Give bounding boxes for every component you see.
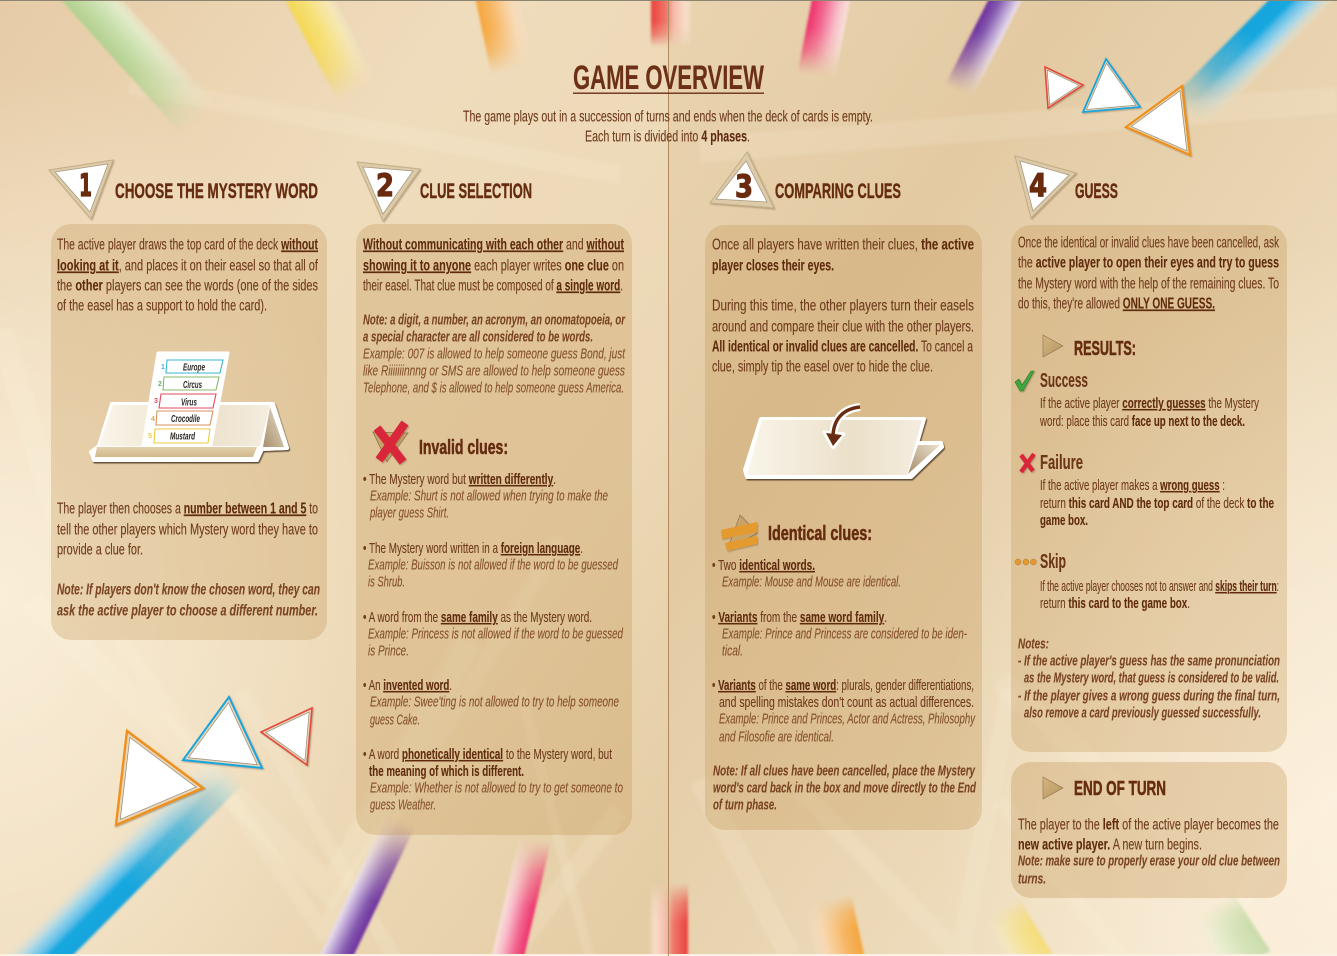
list: invalid clues: Example: Swee'ting is not allowed to try to help someone [370, 694, 619, 710]
result: failure [1021, 452, 1274, 529]
list: invalid clues: Example: Buisson is not allowed if the word to be guessed [368, 558, 619, 574]
icon: triangle 3: 3 [735, 169, 753, 205]
icon: triangle 1 [49, 160, 113, 219]
note and examples: Example: 007 is allowed to help someone guess Bond, just [363, 346, 626, 362]
text block: writing a clue: Without communicating with each other and without [363, 236, 624, 254]
illustration: easel with card: 1 [161, 364, 165, 371]
result: failure: return this card AND the top card of the deck to the [1040, 496, 1274, 512]
result: skip: return this card to the game box. [1040, 596, 1190, 612]
list: identical clues: • Variants from the same word family. [712, 610, 887, 626]
result: failure: If the active player makes a wrong guess : [1040, 478, 1225, 494]
text block: next player [1018, 816, 1280, 888]
illustration: easel with card: Mustard [170, 430, 195, 442]
step 2 heading: CLUE SELECTION [420, 180, 532, 203]
step 2 heading [357, 162, 532, 221]
illustration: easel with card: Circus [183, 379, 202, 391]
icon: end of turn arrow [1043, 777, 1063, 799]
list: invalid clues: guess Weather. [370, 798, 436, 814]
note and examples: Note: a digit, a number, an acronym, an onomatopoeia, or [363, 312, 626, 328]
note: of turn phase. [713, 798, 777, 814]
icon: triangle 4: 4 [1029, 168, 1047, 204]
note: word's card back in the box and move directly to the End [713, 780, 977, 796]
list: invalid clues: • A word phonetically identical to the Mystery word, but [363, 747, 612, 763]
list: invalid clues: • An invented word. [363, 678, 452, 694]
icon: triangle 2 [357, 162, 420, 221]
panel: end of turn [1011, 762, 1287, 898]
list: identical clues [712, 558, 975, 746]
result: success: If the active player correctly guesses the Mystery [1040, 396, 1260, 412]
result: success: word: place this card face up next to the deck. [1039, 414, 1245, 430]
list: identical clues: tical. [722, 644, 743, 660]
list: identical clues: and Filosofie are identical. [719, 730, 834, 746]
panel: comparing clues [705, 225, 982, 830]
text block: drawing the card: of the easel has a support to hold the card). [57, 298, 267, 314]
note: Note: If all clues have been cancelled, place the Mystery [713, 764, 976, 780]
title: GAME OVERVIEW [573, 59, 765, 97]
illustration: tipped easel with arrow [745, 407, 942, 477]
note: Note: If players don't know the chosen word, they can [57, 582, 320, 598]
list: invalid clues: • The Mystery word written in a foreign language. [363, 541, 583, 557]
list: invalid clues [363, 472, 624, 814]
text block: choosing a number: The player then chooses a number between 1 and 5 to [57, 500, 318, 518]
text block: drawing the card: The active player draws the top card of the deck without [57, 236, 318, 254]
list: identical clues: Example: Mouse and Mouse are identical. [722, 574, 901, 590]
list: invalid clues: guess Cake. [370, 712, 420, 728]
intro text: Each turn is divided into 4 phases. [585, 128, 750, 146]
text block: closing eyes: clue, simply tip the easel over to hide the clue. [712, 358, 933, 376]
list: invalid clues: Example: Princess is not allowed if the word to be guessed [368, 626, 624, 642]
result: failure: Failure [1040, 452, 1083, 474]
list: identical clues: • Two identical words. [712, 558, 815, 574]
step 4 heading [1015, 156, 1118, 218]
result: skip [1015, 551, 1279, 612]
list: invalid clues: the meaning of which is different. [369, 764, 524, 780]
icon: results arrow [1043, 335, 1063, 357]
intro text [463, 108, 873, 146]
list: identical clues: • Variants of the same word: plurals, gender differentiations, [712, 678, 974, 694]
illustration: easel with card: Europe [183, 362, 205, 374]
result: success: Success [1040, 370, 1088, 392]
heading: identical clues: Identical clues: [768, 523, 872, 545]
text block: choosing a number [57, 500, 318, 558]
illustration: easel with card: 3 [154, 398, 158, 405]
list: invalid clues: player guess Shirt. [369, 506, 449, 522]
icon: invalid cross [373, 423, 408, 462]
note: ask the active player to choose a different number. [57, 602, 318, 620]
step 3 heading [710, 152, 901, 208]
step 3 heading: COMPARING CLUES [775, 180, 901, 203]
note and examples: a special character are all considered to be words. [363, 330, 593, 346]
illustration: easel with card: 5 [148, 433, 152, 440]
list: invalid clues: • The Mystery word but written differently. [363, 472, 556, 488]
note and examples: Telephone, and $ is allowed to help someone guess America. [363, 380, 624, 396]
list: invalid clues: Example: Shurt is not allowed when trying to make the [370, 488, 608, 504]
illustration: easel with card: 4 [151, 416, 155, 423]
list: identical clues: Example: Prince and Princess are considered to be iden- [722, 626, 967, 642]
intro text: The game plays out in a succession of turns and ends when the deck of cards is empty. [463, 108, 873, 126]
decoration: triangles top right [1045, 59, 1190, 155]
note [57, 582, 320, 620]
text block: next player: turns. [1018, 872, 1046, 888]
text block: next player: The player to the left of the active player becomes the [1018, 816, 1279, 834]
result: failure: game box. [1040, 513, 1088, 529]
note and examples: like Riiiiiiinnng or SMS are allowed to help someone guess [363, 364, 625, 380]
text block: choosing a number: tell the other players which Mystery word they have to [57, 522, 318, 538]
text block: drawing the card [57, 236, 318, 314]
text block: writing a clue: their easel. That clue must be composed of a single word. [363, 278, 623, 294]
panel: guess [1011, 225, 1287, 752]
step 1 heading: CHOOSE THE MYSTERY WORD [115, 180, 318, 203]
heading: end of turn: END OF TURN [1074, 778, 1166, 800]
result: skip: Skip [1040, 551, 1066, 573]
icon: orange dots [1015, 559, 1036, 565]
panel: choose the mystery word [51, 224, 327, 640]
note and examples [363, 312, 626, 396]
illustration: easel with card: Crocodile [171, 413, 200, 425]
decoration: triangles bottom left [116, 697, 312, 825]
text block: closing eyes: All identical or invalid clues are cancelled. To cancel a [712, 338, 973, 356]
text block: next player: new active player. A new turn begins. [1018, 836, 1202, 854]
illustration: easel with card [91, 353, 287, 460]
text block: choosing a number: provide a clue for. [57, 542, 143, 558]
icon: identical equals [721, 515, 757, 551]
step 1 heading [49, 160, 318, 219]
text block: guessing: do this, they're allowed ONLY ONE GUESS. [1018, 296, 1215, 312]
illustration: easel with card: Virus [181, 396, 197, 408]
icon: triangle 2: 2 [376, 168, 394, 204]
icon: triangle 1: 1 [79, 168, 92, 204]
text block: closing eyes: around and compare their clue with the other players. [712, 318, 974, 336]
heading: results: RESULTS: [1074, 338, 1136, 360]
text block: drawing the card: the other players can see the words (one of the sides [57, 278, 318, 294]
icon: triangle 3 [710, 152, 774, 208]
list: identical clues: Example: Prince and Princes, Actor and Actress, Philosophy [719, 712, 975, 728]
text block: writing a clue: showing it to anyone each player writes one clue on [363, 258, 624, 274]
text block: drawing the card: looking at it, and places it on their easel so that all of [57, 258, 318, 274]
heading: invalid clues: Invalid clues: [419, 437, 508, 459]
notes [1018, 636, 1280, 722]
list: invalid clues: is Prince. [368, 644, 409, 660]
list: invalid clues: is Shrub. [368, 574, 405, 590]
panel: clue selection [356, 224, 632, 835]
icon: green check [1015, 371, 1034, 391]
list: identical clues: and spelling mistakes don't count as actual differences. [719, 695, 974, 711]
note [713, 764, 977, 814]
illustration: easel with card: 2 [158, 381, 162, 388]
icon: red cross [1021, 454, 1034, 472]
text block: closing eyes [712, 236, 974, 376]
text block: closing eyes: player closes their eyes. [712, 258, 834, 274]
text block: guessing [1018, 234, 1279, 312]
step 4 heading: GUESS [1075, 180, 1118, 203]
list: invalid clues: • A word from the same family as the Mystery word. [363, 610, 592, 626]
text block: writing a clue [363, 236, 624, 294]
result: success [1015, 370, 1260, 430]
text block: closing eyes: During this time, the other players turn their easels [712, 298, 974, 314]
result: skip: If the active player chooses not to answer and skips their turn: [1040, 579, 1279, 595]
list: invalid clues: Example: Whether is not allowed to try to get someone to [370, 780, 623, 796]
text block: closing eyes: Once all players have written their clues, the active [712, 236, 974, 254]
notes: Notes: [1018, 636, 1049, 652]
